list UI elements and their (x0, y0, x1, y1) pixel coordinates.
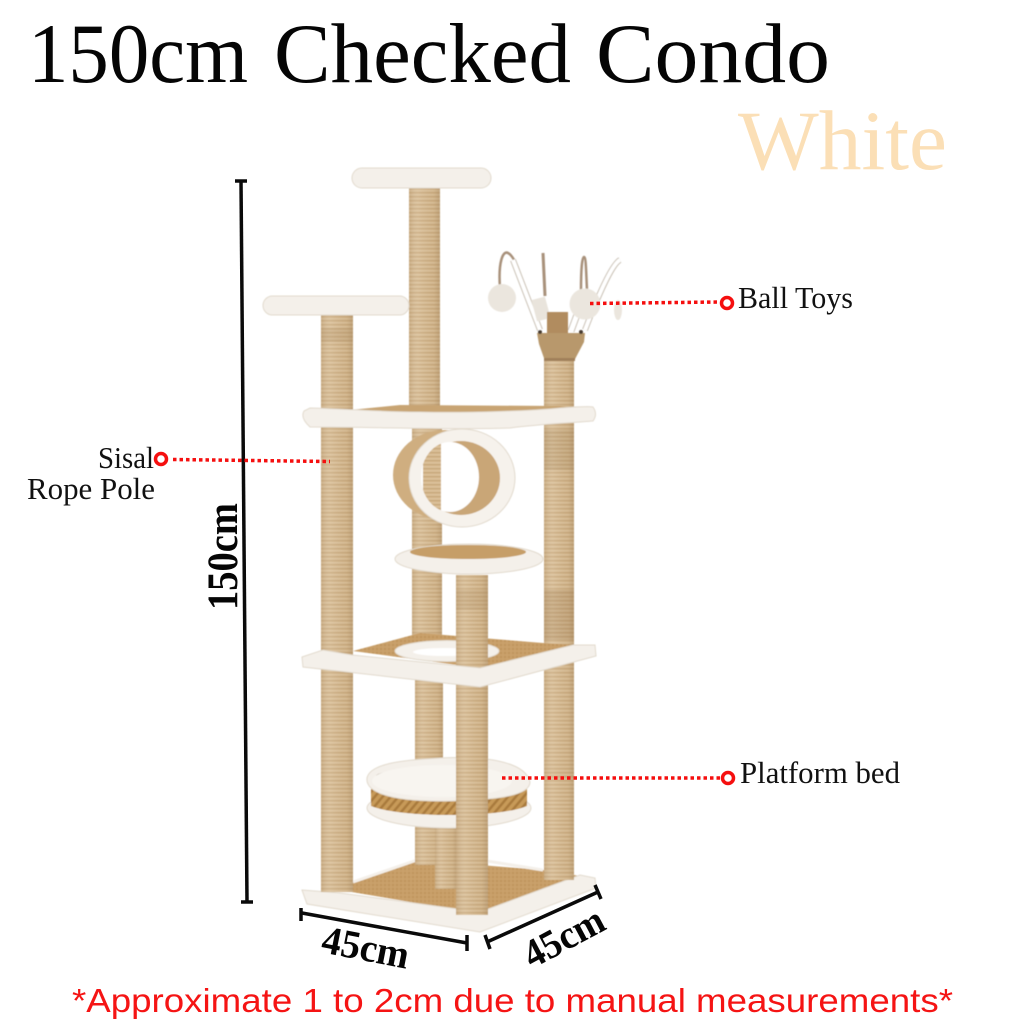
width label: 45cm (318, 917, 413, 978)
pole: centre back (409, 184, 443, 865)
colour label: White: White (738, 94, 947, 188)
title: 150cm (28, 7, 248, 101)
title: Condo (596, 7, 830, 101)
platform: middle disc (395, 544, 543, 574)
pole: right (544, 358, 574, 880)
width dimension line (301, 908, 467, 951)
height label: 150cm (200, 503, 247, 610)
cat tree illustration (263, 168, 622, 932)
callout: sisal rope pole (27, 440, 330, 506)
callout: ball toys: Ball Toys (738, 280, 853, 315)
platform bed (367, 758, 531, 828)
footnote: *Approximate 1 to 2cm due to manual measurements* (72, 982, 953, 1019)
platform: upper ring (303, 405, 596, 429)
pole: short centre support (435, 825, 457, 889)
callout: platform bed: Platform bed (740, 755, 900, 790)
pole: front (456, 575, 488, 915)
height dimension line (235, 181, 253, 902)
platform: lower square (353, 633, 573, 668)
pole: left (321, 312, 353, 892)
title: Checked (274, 7, 571, 101)
callout: ball toys (590, 280, 853, 315)
base platform (302, 860, 596, 932)
depth label: 45cm (515, 897, 612, 977)
platform lower square front band (302, 645, 596, 687)
funnel pole top (537, 312, 585, 361)
platform: top perch (352, 168, 491, 188)
callout: sisal rope pole: Sisal (98, 440, 154, 475)
callout: platform bed (502, 755, 900, 790)
depth dimension line (485, 885, 601, 949)
title (28, 7, 830, 101)
tunnel ring (393, 429, 515, 527)
callout: sisal rope pole: Rope Pole (27, 471, 155, 506)
ball toys (488, 253, 622, 331)
platform: left perch (263, 296, 409, 315)
